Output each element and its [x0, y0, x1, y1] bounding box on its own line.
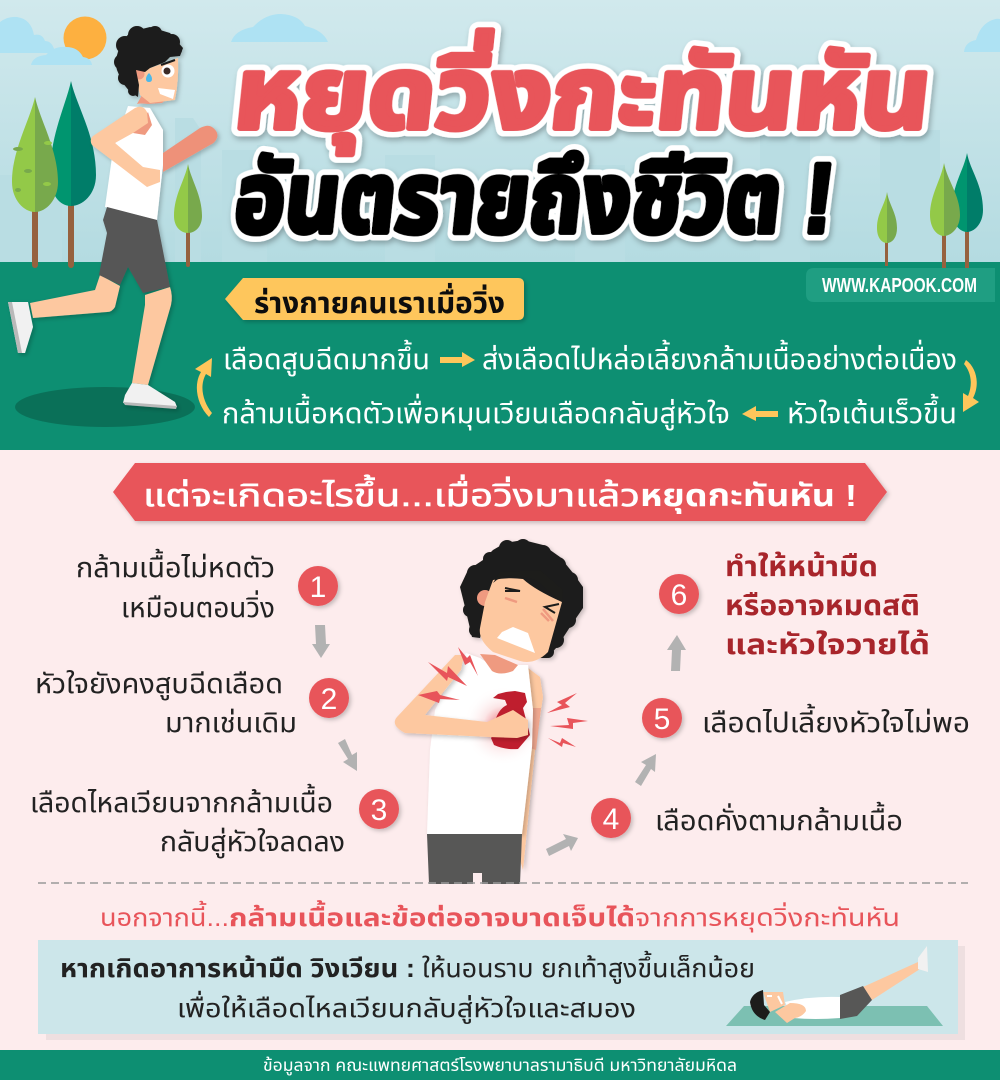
step 3 badge	[359, 789, 399, 829]
green ground panel	[0, 262, 1000, 450]
step 5 badge: 5	[654, 703, 670, 736]
back shoe	[8, 302, 33, 353]
shorts	[99, 207, 170, 293]
step 2 text: มากเช่นเดิม	[165, 707, 297, 738]
pink section background	[0, 450, 1000, 1050]
front shoe	[123, 383, 177, 407]
step 6 text: ทำให้หน้ามืด	[725, 551, 878, 582]
neck	[480, 654, 518, 674]
step 6 text	[725, 551, 930, 660]
cloud right	[964, 19, 1000, 52]
step 4 badge: 4	[603, 803, 619, 836]
additional warning line: นอกจากนี้...	[100, 900, 229, 932]
curly hair	[460, 539, 583, 658]
subheading tag: ร่างกายคนเราเมื่อวิ่ง	[254, 282, 505, 320]
front arm	[91, 107, 160, 187]
curved arrow right	[963, 360, 979, 412]
shirt	[427, 653, 533, 834]
trees left	[12, 81, 202, 268]
teeth	[158, 88, 175, 99]
title line 1: หยุดวิ่งกะทันหัน	[229, 30, 937, 154]
curly hair	[114, 26, 183, 97]
sky background	[0, 0, 1000, 262]
step 2 badge: 2	[321, 683, 337, 716]
clutching chest figure	[395, 539, 588, 884]
step 3 text: เลือดไหลเวียนจากกล้ามเนื้อ	[30, 783, 333, 818]
arrow 3 to 4	[546, 834, 578, 856]
step 2 badge	[309, 678, 349, 718]
back arm	[163, 126, 217, 172]
red banner: หยุดกะทันหัน !	[640, 478, 857, 514]
step 1 text: เหมือนตอนวิ่ง	[121, 590, 275, 623]
ground shadow ellipse	[15, 387, 195, 427]
runner illustration	[8, 26, 217, 409]
forehead hair strands	[493, 570, 563, 602]
red banner: แต่จะเกิดอะไรขึ้น...เมื่อวิ่งมาแล้ว	[143, 474, 640, 513]
step 5 text: เลือดไปเลี้ยงหัวใจไม่พอ	[702, 703, 970, 738]
ear	[134, 68, 144, 80]
exercise mat	[726, 1006, 943, 1026]
pain bolts	[418, 647, 588, 747]
arrow right	[440, 352, 475, 367]
step 3 text	[30, 783, 345, 859]
arrow 4 to 5	[635, 754, 656, 786]
cloud small	[31, 47, 92, 65]
step 2 text: หัวใจยังคงสูบฉีดเลือด	[35, 668, 283, 701]
face	[480, 578, 562, 662]
step 5 badge	[642, 698, 682, 738]
step 4 badge	[591, 798, 631, 838]
neck	[137, 95, 168, 104]
armpit shade	[133, 112, 152, 135]
curved arrow left	[195, 358, 212, 417]
step 6 badge: 6	[671, 579, 687, 612]
clutching arm	[395, 655, 528, 738]
eye and sweat	[162, 64, 174, 78]
cloud centre	[231, 14, 328, 42]
step 1 badge: 1	[310, 571, 326, 604]
advice text: หากเกิดอาการหน้ามืด วิงเวียน :	[60, 953, 415, 983]
sun	[64, 16, 106, 60]
advice text: เพื่อให้เลือดไหลเวียนกลับสู่หัวใจและสมอง	[177, 990, 636, 1024]
face	[136, 58, 178, 103]
cycle text step 1: เลือดสูบฉีดมากขึ้น	[223, 339, 430, 377]
front leg	[132, 287, 172, 385]
cycle text step 3: หัวใจเต้นเร็วขึ้น	[787, 393, 957, 430]
city skyline	[0, 118, 940, 262]
title line 1: หยุดวิ่งกะทันหัน	[229, 30, 937, 154]
back leg	[30, 275, 120, 318]
cycle text step 4: กล้ามเนื้อหดตัวเพื่อหมุนเวียนเลือดกลับสู่หัวใจ	[222, 393, 730, 431]
step 1 text: กล้ามเนื้อไม่หดตัว	[76, 548, 275, 583]
step 6 badge	[659, 574, 699, 614]
footer bar: ข้อมูลจาก คณะแพทยศาสตร์โรงพยาบาลรามาธิบดี มหาวิทยาลัยมหิดล	[263, 1055, 737, 1077]
sleeve patch	[527, 708, 541, 750]
advice text: ให้นอนราบ ยกเท้าสูงขึ้นเล็กน้อย	[422, 950, 755, 984]
additional warning line	[100, 900, 900, 933]
arrow left	[742, 406, 778, 421]
arrow 2 to 3	[338, 739, 357, 771]
lying person	[750, 946, 928, 1023]
trees right	[877, 153, 983, 268]
additional warning line: จากการหยุดวิ่งกะทันหัน	[635, 901, 900, 933]
footer bar	[0, 1050, 1000, 1080]
additional warning line: กล้ามเนื้อและข้อต่ออาจบาดเจ็บได้	[229, 900, 635, 932]
title line 2: อันตรายถึงชีวิต !	[230, 143, 839, 253]
advice panel	[38, 940, 965, 1040]
advice text	[60, 950, 755, 1024]
step 1 badge	[298, 566, 338, 606]
step 6 text: และหัวใจวายได้	[725, 629, 930, 660]
pants	[427, 834, 522, 884]
open mouth	[497, 627, 535, 653]
step 4 text: เลือดคั่งตามกล้ามเนื้อ	[655, 801, 903, 836]
website badge	[806, 268, 995, 302]
step 1 text	[76, 548, 275, 623]
step 2 text	[35, 668, 297, 738]
step 6 text: หรืออาจหมดสติ	[725, 590, 920, 621]
cloud left	[0, 17, 55, 53]
red banner	[113, 463, 887, 521]
step 3 text: กลับสู่หัวใจลดลง	[160, 826, 345, 859]
heart glow	[463, 686, 543, 766]
eyes and cheeks	[505, 588, 559, 613]
shirt	[105, 106, 163, 220]
subheading tag	[225, 278, 524, 320]
arrow 5 to 6	[667, 635, 686, 671]
step 3 badge: 3	[371, 794, 387, 827]
cycle text step 2: ส่งเลือดไปหล่อเลี้ยงกล้ามเนื้ออย่างต่อเนื่อง	[482, 339, 957, 376]
right arm	[520, 668, 543, 870]
heart	[491, 691, 530, 749]
ear	[477, 590, 493, 606]
title line 2: อันตรายถึงชีวิต !	[230, 143, 839, 253]
arrow 1 to 2	[312, 625, 330, 658]
